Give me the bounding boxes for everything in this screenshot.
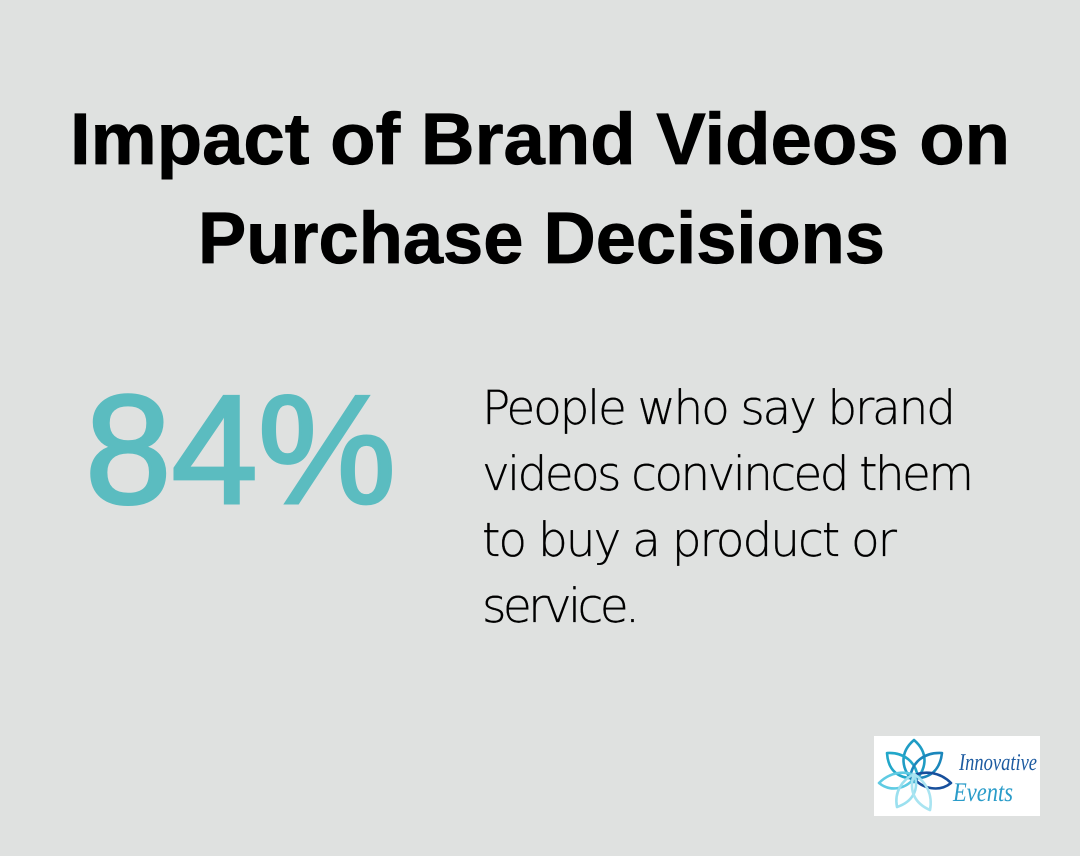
description text: videos convinced them	[482, 447, 974, 502]
logo: Innovative Events	[874, 736, 1040, 816]
description text: to buy a product or	[482, 513, 898, 568]
icon: lotus flower	[879, 740, 951, 810]
logo wordmark: Innovative	[958, 750, 1037, 776]
description text: service.	[482, 579, 640, 634]
statistic: 84%: 84%	[85, 363, 396, 536]
description text	[482, 381, 974, 634]
logo wordmark	[952, 750, 1037, 807]
description text: People who say brand	[482, 381, 956, 436]
logo wordmark: Events	[952, 777, 1013, 807]
title: Purchase Decisions	[198, 198, 885, 279]
title	[70, 99, 1010, 279]
title: Impact of Brand Videos on	[70, 99, 1010, 180]
